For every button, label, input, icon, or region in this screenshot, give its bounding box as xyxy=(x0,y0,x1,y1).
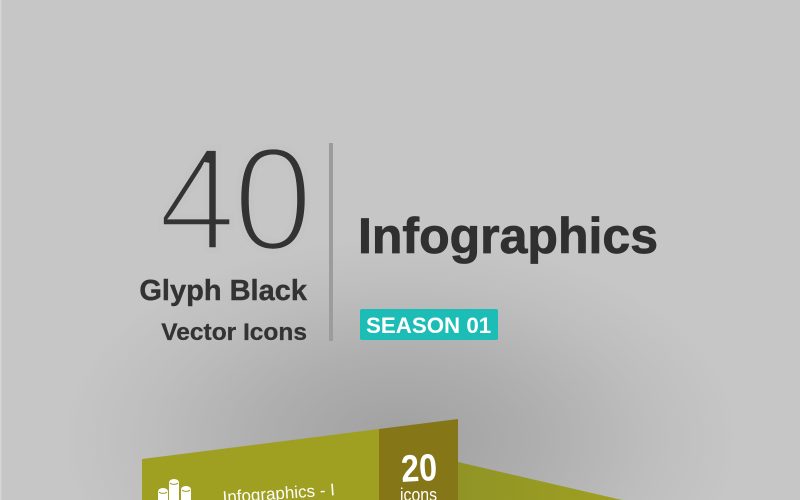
big number 40: 4 xyxy=(158,117,236,282)
panel: category card xyxy=(142,419,622,500)
badge: season 01: SEASON 01 xyxy=(366,313,491,338)
subtitle: Glyph Black: Glyph Black xyxy=(139,275,308,307)
big number 40: 0 xyxy=(233,117,313,282)
heading: Infographics: Infographics xyxy=(358,208,658,264)
big number 40 xyxy=(158,117,313,282)
vertical divider xyxy=(329,143,333,341)
card side face xyxy=(458,462,622,500)
icon: cylinders xyxy=(158,479,191,500)
card count number: 20 xyxy=(400,447,438,491)
card count tab xyxy=(379,419,458,500)
subtitle: Vector Icons: Vector Icons xyxy=(161,319,307,346)
card main face xyxy=(142,429,379,500)
